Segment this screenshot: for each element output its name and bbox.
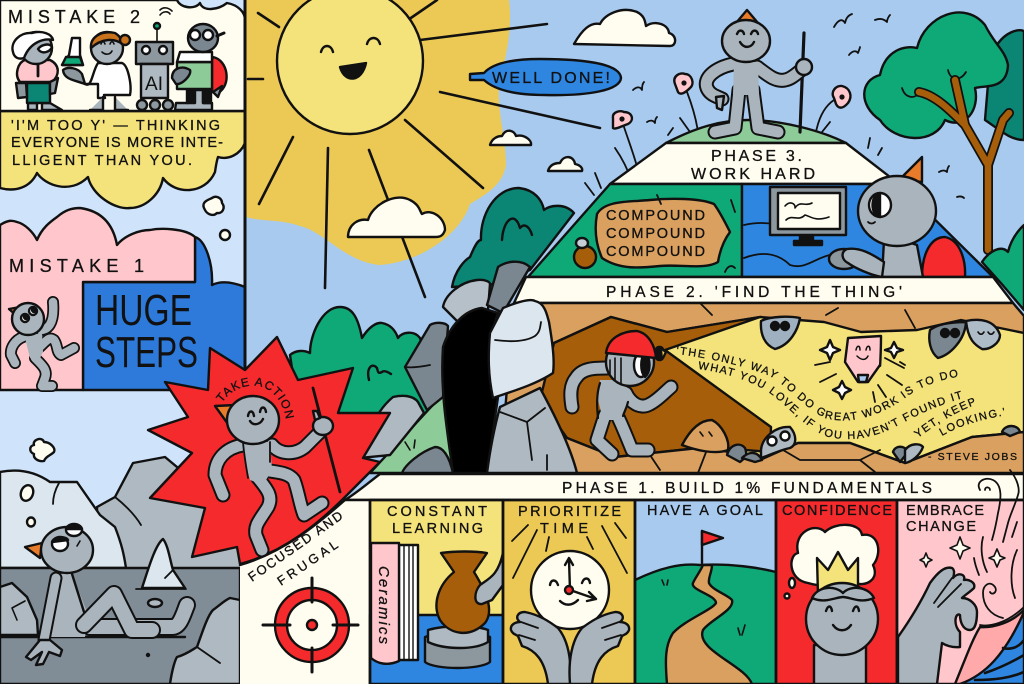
panel: mistake 1: STEPS: [95, 328, 198, 377]
panel: prioritize time: [503, 500, 635, 684]
clouds: [348, 10, 675, 237]
hand: [898, 568, 977, 684]
speech bubble: well done: WELL DONE!: [492, 70, 610, 87]
pottery wheel and vase: [425, 552, 490, 668]
birds: [633, 14, 964, 198]
panel: phase 1 band: [345, 474, 1024, 500]
panel: compound: [528, 184, 742, 277]
crystal: [815, 336, 905, 402]
panel: phase 2 band: [514, 277, 1013, 303]
phase 3 hilltop: [666, 120, 846, 143]
panel: mistake 2 thought cloud: MISTAKE 2: [8, 7, 140, 27]
panel: phase 3 band: PHASE 3.: [711, 148, 802, 165]
panel: mine: WHAT YOU LOVE, IF YOU HAVEN'T FOUND IT: [699, 361, 961, 440]
panel: have a goal: HAVE A GOAL: [647, 503, 763, 519]
quote: 'THE ONLY WAY TO DO GREAT WORK IS TO DO: [677, 346, 958, 421]
panel: phase 3 band: [610, 143, 899, 184]
panel: mine: [504, 302, 1024, 473]
panel: embrace change: [897, 470, 1024, 684]
starburst: take action: TAKE ACTION: [216, 378, 294, 418]
panel: compound: COMPOUND: [606, 226, 705, 242]
dancing figure: [9, 302, 74, 386]
panel: mistake 1: [0, 208, 245, 390]
potter's hand: [475, 553, 503, 604]
panel: mine: YET, KEEP: [913, 398, 974, 436]
person with books: [172, 24, 227, 110]
panel: mistake 2 thought cloud: EVERYONE IS MORE INTE-: [11, 135, 223, 151]
icon: clock face: [531, 551, 609, 629]
small cloud puffs: [203, 197, 230, 240]
column divider: [244, 0, 246, 390]
panel: focused and frugal: FOCUSED AND: [245, 508, 345, 584]
panel: prioritize time: TIME: [540, 521, 588, 537]
panel: left column sky: [0, 0, 245, 575]
hands holding clock: [511, 612, 629, 684]
panel: mistake 1: MISTAKE 1: [9, 256, 144, 276]
panel: focused and frugal: FRUGAL: [274, 537, 341, 588]
sun with rays: [246, 0, 600, 297]
lying figure: [25, 524, 187, 665]
panel: mistake 2 thought cloud: [0, 0, 245, 208]
book: Ceramics: [375, 566, 392, 644]
panel: have a goal: [635, 500, 776, 684]
panel: mistake 2 thought cloud: 'I'M TOO Y' — THINKING: [11, 118, 220, 134]
panel: confidence: [776, 500, 897, 684]
panel: compound: COMPOUND: [606, 208, 705, 224]
bushes: [290, 188, 1024, 420]
scientist old: [12, 32, 62, 110]
figure with staff on hilltop: [706, 10, 812, 132]
icon: target: [263, 578, 358, 672]
left-bottom rocky scene: [0, 439, 245, 684]
panel: embrace change: EMBRACE: [906, 503, 984, 519]
robot AI: [136, 8, 173, 110]
panel: phase 1 band: PHASE 1. BUILD 1% FUNDAMENTALS: [562, 480, 932, 497]
panel: mine: - STEVE JOBS: [928, 451, 1017, 463]
panel: embrace change: CHANGE: [906, 519, 976, 535]
panel: constant learning: LEARNING: [392, 521, 483, 537]
tree: [864, 13, 1024, 250]
panel: focused and frugal: [240, 500, 370, 684]
panel: prioritize time: PRIORITIZE: [518, 504, 621, 520]
panel: phase 2 band: PHASE 2. 'FIND THE THING': [606, 284, 902, 301]
panel: mine: LOOKING.': [938, 408, 1004, 436]
panel: constant learning: [370, 500, 503, 684]
panel grid lines: [345, 500, 1024, 684]
panel: constant learning: CONSTANT: [387, 504, 487, 520]
panel: compound: COMPOUND: [606, 244, 705, 260]
monitor: [770, 187, 846, 245]
robot AI: AI: [145, 74, 163, 95]
miner figure: [571, 331, 671, 454]
panel: mistake 2 thought cloud: LLIGENT THAN YOU.: [12, 153, 192, 169]
speech bubble: well done: [470, 59, 621, 95]
rocks and cave: [360, 262, 577, 473]
flowers and grass: [585, 73, 882, 195]
panel: confidence: CONFIDENCE: [782, 503, 892, 519]
panel: mistake 1: HUGE: [95, 286, 192, 335]
scientist and flask: [62, 32, 131, 110]
panel: phase 3 band: WORK HARD: [691, 166, 815, 183]
starburst: take action: [146, 336, 392, 564]
rock faces: [682, 317, 1020, 463]
book: [371, 543, 418, 664]
panel: computer: [742, 157, 993, 277]
